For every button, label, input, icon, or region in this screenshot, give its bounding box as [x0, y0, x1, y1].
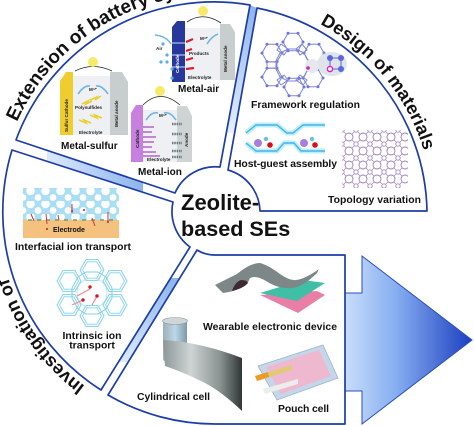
- label: Intrinsic ion transport: Intrinsic ion: [63, 331, 121, 342]
- label: Metal-ion: Metal-ion: [138, 167, 182, 178]
- right arrow: [345, 256, 472, 424]
- diagram: metal-ion battery: Cathode: [135, 129, 140, 148]
- diagram: metal-ion battery: Mⁿ⁺: [159, 113, 168, 118]
- diagram: wearable electronic device: [203, 263, 337, 333]
- label: Metal-air: Metal-air: [178, 84, 219, 95]
- heading: Design of materials: Design of materials: [321, 14, 432, 150]
- diagram: framework regulation: [251, 32, 360, 111]
- center title: [181, 190, 290, 241]
- label: Host-guest assembly: Host-guest assembly: [234, 159, 337, 170]
- diagram: metal-ion battery: Anode: [184, 132, 189, 147]
- panel: extension of battery systems: [16, 2, 250, 193]
- diagram: topology variation: [328, 130, 421, 206]
- diagram: metal-air battery: Mⁿ⁺: [200, 36, 209, 41]
- channel highlight: top: [226, 5, 257, 133]
- label: Metal-sulfur: Metal-sulfur: [61, 141, 118, 152]
- diagram: pouch cell: [255, 345, 338, 415]
- diagram: metal-sulfur battery: Polysulfides: [75, 105, 103, 110]
- diagram: metal-air battery: Air: [156, 46, 163, 51]
- diagram: metal-sulfur battery: Metal anode: [114, 100, 119, 127]
- diagram: cylindrical cell: [137, 318, 242, 411]
- diagram: metal-sulfur battery: Sulfur Cathode: [64, 99, 69, 132]
- label: Wearable electronic device: Wearable electronic device: [203, 322, 337, 333]
- label: Framework regulation: Framework regulation: [251, 100, 360, 111]
- center title: based SEs: [181, 216, 290, 241]
- label: Interfacial ion transport: Interfacial ion transport: [15, 242, 132, 253]
- label: Intrinsic ion transport: transport: [69, 340, 115, 352]
- diagram: metal-ion battery: Electrolyte: [147, 157, 171, 162]
- diagram: interfacial ion transport: Electrode: [53, 227, 85, 234]
- center title: Zeolite-: [181, 190, 259, 215]
- diagram: host-guest assembly: [234, 125, 337, 170]
- diagram: metal-air battery: [155, 6, 235, 95]
- label: Pouch cell: Pouch cell: [278, 404, 329, 415]
- channel highlight: lower left: [118, 278, 180, 362]
- diagram: metal-ion battery: [131, 86, 192, 178]
- label: Cylindrical cell: Cylindrical cell: [137, 392, 210, 403]
- diagram: metal-air battery: Metal anode: [223, 45, 228, 72]
- diagram: interfacial ion transport: [15, 188, 132, 253]
- diagram: metal-air battery: Electrolyte: [188, 75, 212, 80]
- panel: design of materials: [228, 8, 427, 211]
- diagram: metal-air battery: Products: [189, 51, 209, 56]
- diagram: metal-sulfur battery: Mⁿ⁺: [89, 87, 98, 92]
- channel highlight: left: [47, 150, 143, 192]
- label: Topology variation: Topology variation: [328, 195, 421, 206]
- diagram: metal-sulfur battery: [60, 57, 128, 152]
- diagram: metal-sulfur battery: Electrolyte: [79, 130, 103, 135]
- diagram: metal-air battery: Cathode: [175, 54, 180, 73]
- diagram: intrinsic ion transport: [57, 260, 127, 352]
- panel: battery applications: [108, 250, 345, 424]
- panel: investigation of ion transport: [3, 150, 190, 390]
